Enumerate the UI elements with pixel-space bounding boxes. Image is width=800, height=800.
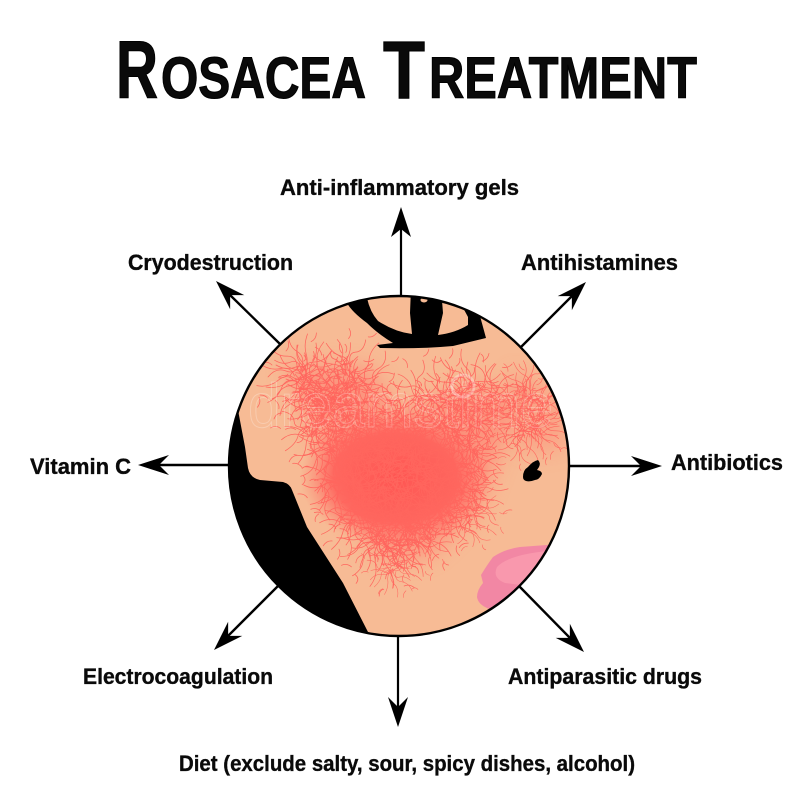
title <box>116 25 697 116</box>
arrow: up <box>391 207 411 296</box>
redness glow <box>285 365 565 560</box>
label: antibiotics: Antibiotics <box>671 450 783 475</box>
label: vitamin C: Vitamin C <box>30 454 131 479</box>
arrow: right <box>569 456 662 476</box>
label: diet: Diet (exclude salty, sour, spicy dishes, alcohol) <box>179 751 635 776</box>
lips <box>477 545 548 609</box>
title: T <box>383 25 425 116</box>
label: antiparasitic drugs: Antiparasitic drugs <box>508 664 702 689</box>
nostril <box>523 460 542 481</box>
hair <box>230 413 368 632</box>
circle outline <box>229 296 569 636</box>
title: OSACEA <box>161 46 366 111</box>
title: R <box>116 25 158 116</box>
capillary network <box>256 328 567 598</box>
label: electrocoagulation: Electrocoagulation <box>83 664 273 689</box>
label: anti-inflammatory gels: Anti-inflammatory gels <box>280 175 519 200</box>
arrow: lower left <box>207 586 278 657</box>
face circle <box>228 294 570 638</box>
title: REATMENT <box>429 46 697 111</box>
label: antihistamines: Antihistamines <box>521 250 678 275</box>
label: cryodestruction: Cryodestruction <box>128 250 293 275</box>
arrow: upper left <box>209 274 280 344</box>
arrow: upper right <box>521 275 593 347</box>
arrow: lower right <box>519 586 591 659</box>
arrow: down <box>388 637 408 727</box>
eyebrow and eye <box>348 298 486 348</box>
watermark: dreamstime <box>248 372 553 441</box>
arrow: left <box>138 455 228 475</box>
